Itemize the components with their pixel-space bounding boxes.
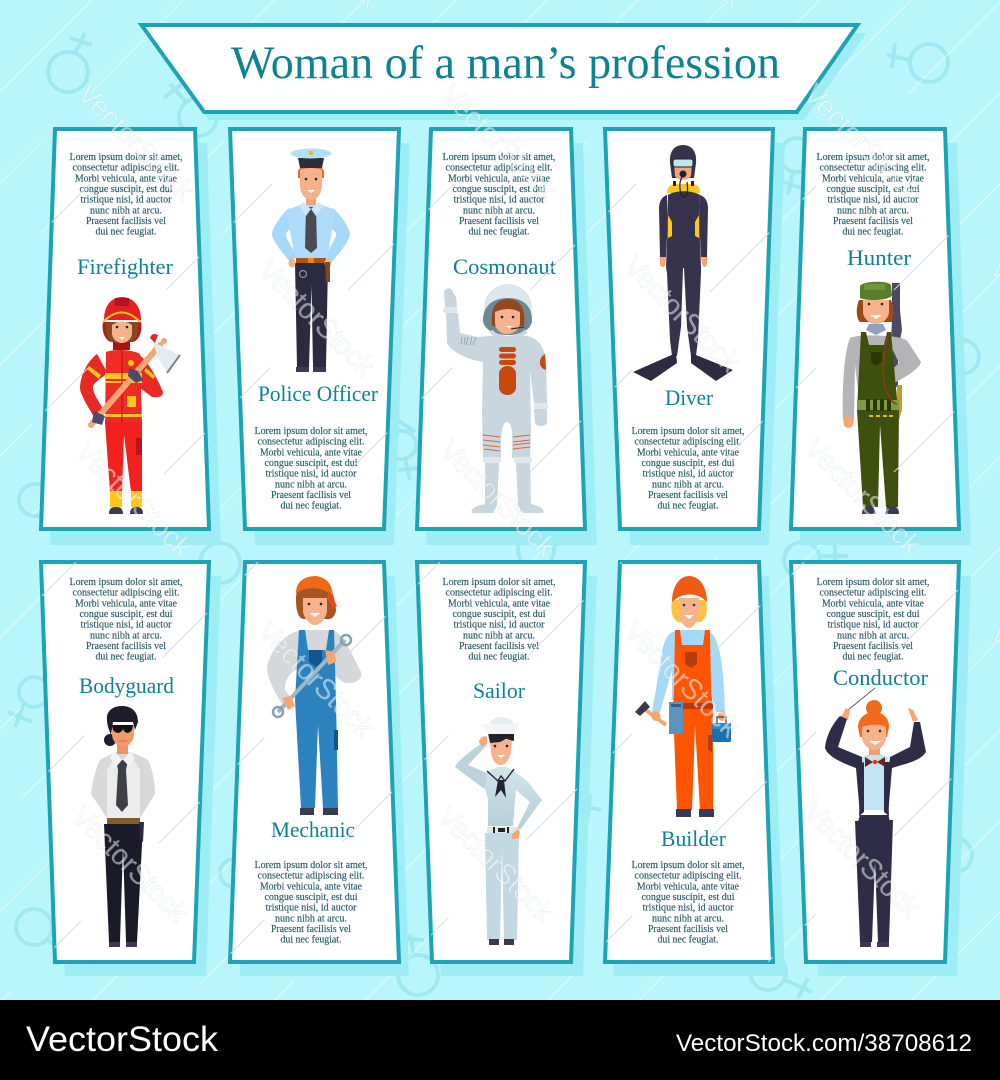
text block: nunc nibh at arcu.: [463, 204, 535, 216]
watermarks: VectorStock: [797, 78, 926, 207]
text block: [70, 576, 183, 663]
footer bar: [0, 1000, 1000, 1080]
heading: Sailor: [473, 678, 526, 703]
figure: bodyguard: [91, 706, 155, 947]
figure: hunter: [843, 282, 921, 514]
text block: tristique nisi, id auctor: [828, 194, 919, 206]
text block: Praesent facilisis vel: [648, 489, 728, 501]
panel crossing lines: [42, 184, 958, 962]
watermarks: VectorStock: [797, 795, 926, 924]
text block: congue suscipit, est dui: [264, 457, 358, 469]
text block: congue suscipit, est dui: [80, 608, 172, 620]
text block: congue suscipit, est dui: [826, 183, 920, 195]
text block: Morbi vehicula, ante vitae: [822, 597, 924, 609]
text block: [816, 576, 930, 663]
watermarks: VectorStock: [617, 250, 746, 379]
text block: consectetur adipiscing elit.: [446, 587, 552, 599]
text block: Lorem ipsum dolor sit amet,: [70, 576, 183, 588]
text block: Praesent facilisis vel: [271, 923, 351, 935]
text block: Praesent facilisis vel: [86, 215, 166, 227]
text block: tristique nisi, id auctor: [80, 619, 172, 631]
heading: Hunter: [847, 245, 912, 270]
text block: dui nec feugiat.: [658, 500, 718, 512]
panel: bodyguard: [41, 562, 221, 976]
text block: Lorem ipsum dolor sit amet,: [816, 576, 930, 588]
heading: Mechanic: [271, 817, 355, 842]
text block: tristique nisi, id auctor: [266, 902, 357, 914]
text block: congue suscipit, est dui: [826, 608, 920, 620]
text block: consectetur adipiscing elit.: [258, 436, 364, 448]
text block: tristique nisi, id auctor: [266, 468, 357, 480]
text block: Praesent facilisis vel: [271, 489, 351, 501]
heading: Cosmonaut: [453, 254, 556, 279]
text block: consectetur adipiscing elit.: [72, 162, 180, 174]
text block: Praesent facilisis vel: [459, 215, 539, 227]
panel: firefighter: [41, 129, 221, 545]
text block: congue suscipit, est dui: [642, 457, 734, 469]
figure: conductor: [825, 688, 926, 947]
panel: hunter: [791, 129, 971, 545]
text block: nunc nibh at arcu.: [652, 912, 724, 924]
text block: dui nec feugiat.: [96, 226, 156, 238]
text block: tristique nisi, id auctor: [454, 194, 545, 206]
title: Woman of a man’s profession: [231, 37, 780, 89]
text block: dui nec feugiat.: [96, 651, 156, 663]
heading: Police Officer: [258, 381, 379, 406]
text block: nunc nibh at arcu.: [90, 629, 162, 641]
text block: consectetur adipiscing elit.: [446, 162, 552, 174]
text block: tristique nisi, id auctor: [642, 902, 734, 914]
text block: Morbi vehicula, ante vitae: [260, 446, 362, 458]
text block: consectetur adipiscing elit.: [820, 162, 926, 174]
text block: dui nec feugiat.: [468, 226, 530, 238]
text block: Lorem ipsum dolor sit amet,: [632, 425, 745, 437]
text block: [254, 859, 368, 946]
text block: nunc nibh at arcu.: [463, 629, 535, 641]
text block: Praesent facilisis vel: [833, 640, 913, 652]
text block: Lorem ipsum dolor sit amet,: [254, 425, 368, 437]
text block: consectetur adipiscing elit.: [72, 587, 180, 599]
text block: Morbi vehicula, ante vitae: [448, 597, 550, 609]
text block: Morbi vehicula, ante vitae: [637, 880, 739, 892]
watermarks: VectorStock: [251, 615, 380, 744]
text block: consectetur adipiscing elit.: [634, 870, 742, 882]
text block: tristique nisi, id auctor: [642, 468, 734, 480]
text block: nunc nibh at arcu.: [275, 912, 347, 924]
text block: Morbi vehicula, ante vitae: [822, 172, 924, 184]
figure: police officer: [272, 148, 350, 372]
text block: dui nec feugiat.: [280, 934, 342, 946]
text block: Morbi vehicula, ante vitae: [75, 172, 177, 184]
text block: dui nec feugiat.: [842, 651, 904, 663]
panel: conductor: [791, 562, 971, 976]
text block: congue suscipit, est dui: [642, 891, 734, 903]
panel: sailor: [417, 562, 597, 976]
text block: [442, 151, 556, 238]
watermarks: VectorStock: [71, 78, 200, 207]
text block: Lorem ipsum dolor sit amet,: [816, 151, 930, 163]
text block: Lorem ipsum dolor sit amet,: [442, 151, 556, 163]
figure: firefighter: [80, 297, 180, 514]
text block: [816, 151, 930, 238]
text block: congue suscipit, est dui: [452, 608, 546, 620]
watermarks: VectorStock: [617, 615, 746, 744]
text block: consectetur adipiscing elit.: [258, 870, 364, 882]
panel: builder: [605, 562, 785, 976]
heading: Bodyguard: [79, 673, 174, 698]
text block: dui nec feugiat.: [468, 651, 530, 663]
text block: nunc nibh at arcu.: [837, 204, 909, 216]
panel: mechanic: [230, 562, 409, 976]
text block: Praesent facilisis vel: [833, 215, 913, 227]
text block: Lorem ipsum dolor sit amet,: [254, 859, 368, 871]
heading: Builder: [661, 826, 727, 851]
text block: Praesent facilisis vel: [459, 640, 539, 652]
text block: dui nec feugiat.: [842, 226, 904, 238]
text block: [70, 151, 183, 238]
text block: [632, 859, 745, 946]
text block: [632, 425, 745, 512]
text block: Morbi vehicula, ante vitae: [448, 172, 550, 184]
text block: Morbi vehicula, ante vitae: [75, 597, 177, 609]
figure: builder: [635, 576, 731, 817]
footer brand: VectorStock: [26, 1020, 219, 1059]
text block: nunc nibh at arcu.: [90, 204, 162, 216]
panel: diver: [605, 129, 785, 545]
watermarks: VectorStock: [434, 78, 563, 207]
text block: consectetur adipiscing elit.: [820, 587, 926, 599]
text block: Morbi vehicula, ante vitae: [637, 446, 739, 458]
text block: congue suscipit, est dui: [80, 183, 172, 195]
text block: dui nec feugiat.: [280, 500, 342, 512]
watermarks: VectorStock: [65, 800, 194, 929]
text block: nunc nibh at arcu.: [652, 478, 724, 490]
text block: Morbi vehicula, ante vitae: [260, 880, 362, 892]
text block: [442, 576, 556, 663]
text block: nunc nibh at arcu.: [837, 629, 909, 641]
text block: consectetur adipiscing elit.: [634, 436, 742, 448]
watermarks: VectorStock: [433, 434, 562, 563]
heading: Firefighter: [77, 254, 174, 279]
text block: [254, 425, 368, 512]
text block: nunc nibh at arcu.: [275, 478, 347, 490]
heading: Diver: [665, 385, 714, 410]
watermarks: VectorStock: [69, 435, 198, 564]
text block: dui nec feugiat.: [658, 934, 718, 946]
text block: tristique nisi, id auctor: [80, 194, 172, 206]
figure: cosmonaut: [443, 284, 548, 513]
text block: Lorem ipsum dolor sit amet,: [442, 576, 556, 588]
heading: Conductor: [833, 665, 929, 690]
watermarks: VectorStock: [252, 254, 381, 383]
text block: tristique nisi, id auctor: [828, 619, 919, 631]
footer url: VectorStock.com/38708612: [676, 1030, 972, 1057]
text block: tristique nisi, id auctor: [454, 619, 545, 631]
watermarks: VectorStock: [798, 432, 927, 561]
figure: sailor: [455, 717, 542, 945]
text block: congue suscipit, est dui: [264, 891, 358, 903]
text block: congue suscipit, est dui: [452, 183, 546, 195]
panel: police officer: [230, 129, 410, 545]
text block: Lorem ipsum dolor sit amet,: [70, 151, 183, 163]
text block: Praesent facilisis vel: [648, 923, 728, 935]
text block: Lorem ipsum dolor sit amet,: [632, 859, 745, 871]
figure: mechanic: [267, 576, 361, 815]
title banner: [142, 25, 867, 120]
panel: cosmonaut: [417, 129, 597, 545]
watermarks: VectorStock: [431, 800, 560, 929]
text block: Praesent facilisis vel: [86, 640, 166, 652]
figure: diver: [633, 145, 733, 381]
